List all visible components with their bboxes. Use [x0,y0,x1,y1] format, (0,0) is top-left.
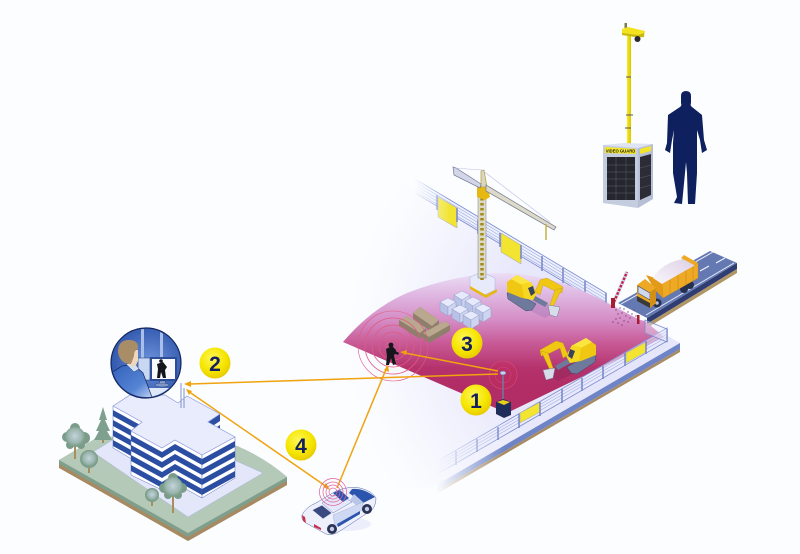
excavator front [540,338,596,381]
arrow: camera to intruder [400,350,498,371]
mast clamps [625,77,633,128]
crane [453,167,556,298]
back fence [410,176,606,307]
arrows [184,350,498,490]
coverage sector [343,273,664,413]
antenna [181,383,184,408]
office grounds [59,420,287,541]
barrier gate [611,272,640,324]
number badge 1: 1 [470,390,482,413]
dump truck [637,255,698,308]
road [618,251,737,328]
mast [627,36,631,146]
camera unit on site [489,361,517,418]
number badge 2: 2 [209,353,221,376]
number badge 1 [460,384,492,416]
trees behind building [62,407,112,473]
arrow: control room to police car [186,389,330,490]
excavator rear [507,275,563,318]
wood stacks [399,307,450,343]
infographic: video guard site surveillance [59,23,737,541]
entry dots [612,307,637,326]
intruder [386,343,399,365]
camera housing [622,23,645,42]
number badge 3: 3 [461,333,473,356]
inset: security operator at monitors [108,328,181,400]
number badge 4 [286,430,316,460]
number badge 3 [452,328,482,358]
number badge 4: 4 [295,435,307,458]
signal rings around intruder [358,311,428,381]
signal rings at police car [320,478,346,506]
front fence [440,319,668,472]
cabinet label: VIDEO GUARD [606,148,635,154]
roof [113,395,235,455]
trees in front of building [145,473,187,513]
arrow: camera to control room [184,374,498,387]
police car [302,487,376,535]
office building [113,383,235,498]
cabinet [603,143,653,208]
mobile solar camera kit [603,23,653,208]
arrow: intruder to police car [337,365,389,488]
rear wing walls [113,406,220,465]
human scale silhouette [665,91,707,204]
site floor platform [417,220,680,492]
front wing walls [131,431,235,498]
number badge 2 [200,348,230,378]
pallets of blocks [440,291,491,329]
